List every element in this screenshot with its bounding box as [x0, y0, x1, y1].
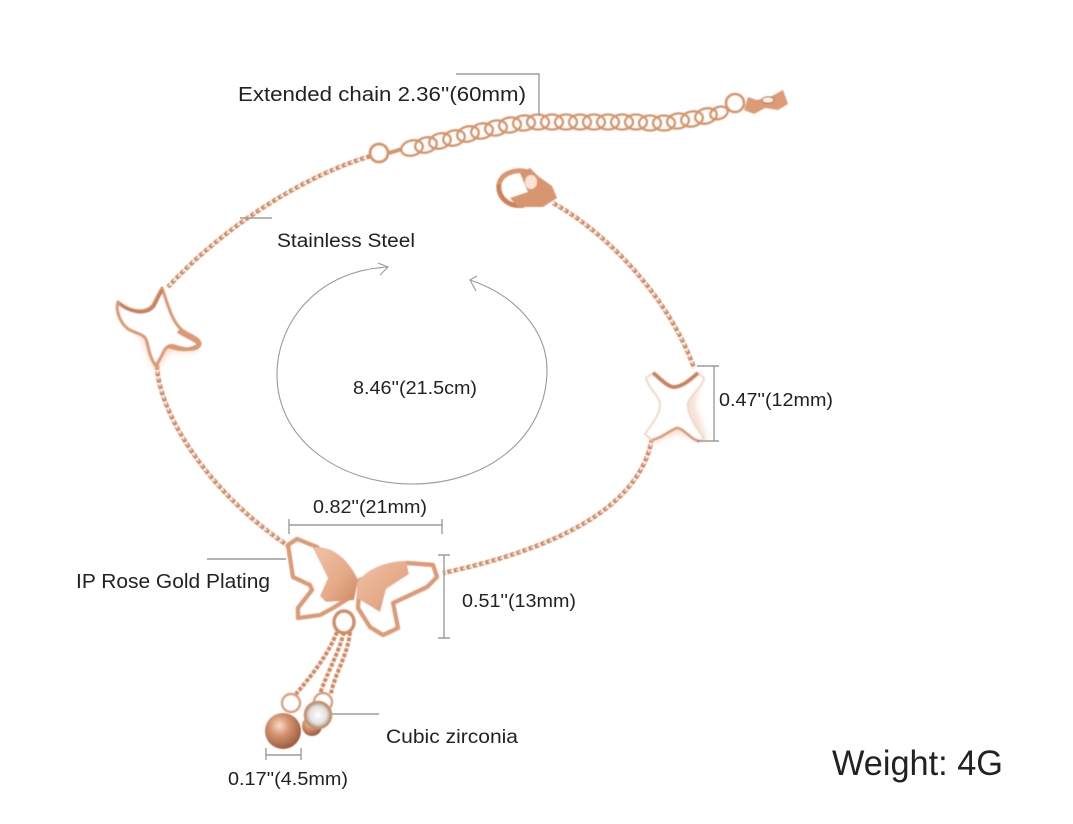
dimension lines: [207, 74, 719, 760]
rose gold ball: [265, 713, 301, 749]
label: butterfly height: 0.51''(13mm): [462, 590, 576, 611]
arrowhead right: [470, 276, 477, 291]
tassels: [265, 632, 350, 749]
bottom edge: [652, 428, 700, 441]
jewellery: anklet: [117, 90, 788, 749]
soft shadow: [650, 378, 708, 444]
label: circumference: 8.46''(21.5cm): [353, 377, 477, 398]
chain: lower right: [443, 438, 652, 573]
top edge: [653, 373, 698, 387]
arrow circle: circumference: [277, 263, 547, 484]
arrowhead left: [378, 263, 388, 275]
right solid wing: [357, 561, 409, 612]
chain: lower left: [157, 365, 287, 545]
small rings: [282, 693, 332, 712]
pendant ring: [334, 611, 354, 633]
soft shadow: [120, 300, 200, 372]
label: ball size: 0.17''(4.5mm): [228, 768, 348, 789]
right wing outline: [358, 563, 437, 635]
label: cubic zirconia: Cubic zirconia: [386, 726, 518, 748]
label: extended chain: Extended chain 2.36''(60mm): [238, 84, 526, 106]
label: weight: Weight: 4G: [832, 744, 1003, 783]
charm body: [117, 288, 200, 366]
end tab of the extension chain: [744, 90, 788, 114]
lobster clasp: [499, 168, 557, 207]
left wing outline: [288, 539, 352, 618]
charm body: [645, 373, 704, 442]
label: charm size: 0.47''(12mm): [719, 389, 833, 410]
chain: upper right: [553, 203, 694, 368]
zirconia stone: [302, 702, 331, 736]
tassel chains: [296, 632, 350, 694]
label: plating: IP Rose Gold Plating: [76, 571, 270, 593]
right arm edge: [168, 331, 199, 349]
charm: left X: [117, 288, 200, 372]
top edge highlight: [120, 290, 162, 312]
left solid wing: [313, 547, 358, 602]
label: stainless steel: Stainless Steel: [277, 231, 415, 252]
butterfly pendant: [288, 539, 437, 635]
label: butterfly width: 0.82''(21mm): [313, 496, 427, 517]
charm: right X: [645, 373, 708, 444]
extension chain: [370, 94, 744, 162]
chain: upper left: [168, 156, 371, 287]
